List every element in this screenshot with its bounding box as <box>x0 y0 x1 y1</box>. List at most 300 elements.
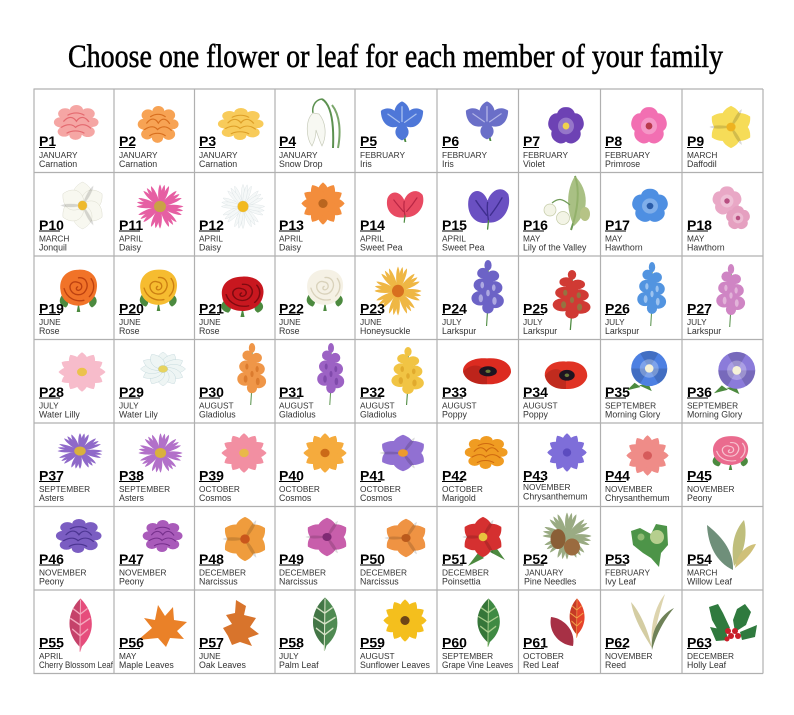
label P13: P13 <box>279 217 304 233</box>
label P41: OCTOBER <box>360 484 401 494</box>
cell P48 <box>199 517 270 586</box>
label P4 <box>279 133 323 169</box>
cell P18 <box>687 186 751 252</box>
label P27 <box>687 300 721 336</box>
label P29: P29 <box>119 384 144 400</box>
label P13: Daisy <box>279 242 302 252</box>
label P53: FEBRUARY <box>605 568 650 578</box>
label P60: SEPTEMBER <box>442 651 493 661</box>
icon: gladiolus <box>317 343 344 405</box>
label P46: P46 <box>39 551 64 567</box>
label P57 <box>199 634 247 670</box>
label P24: P24 <box>442 300 467 316</box>
icon: red leaf <box>551 598 585 646</box>
icon: aster <box>57 433 103 469</box>
icon: rose <box>221 277 264 317</box>
icon: snow drop <box>307 99 340 148</box>
label P7: P7 <box>523 133 540 149</box>
label P59 <box>360 634 431 670</box>
icon: gladiolus <box>237 343 266 405</box>
label P32: P32 <box>360 384 385 400</box>
label P32: Gladiolus <box>360 410 397 420</box>
label P19: JUNE <box>39 317 61 327</box>
label P28: P28 <box>39 384 64 400</box>
cell P29 <box>119 352 186 420</box>
label P1: JANUARY <box>39 150 78 160</box>
label P31: AUGUST <box>279 400 314 410</box>
label P38: SEPTEMBER <box>119 484 170 494</box>
label P31: Gladiolus <box>279 410 316 420</box>
label P41 <box>360 468 401 503</box>
cell P38 <box>119 433 183 503</box>
label P52: Pine Needles <box>524 576 577 586</box>
label P22: JUNE <box>279 317 301 327</box>
label P13: APRIL <box>279 234 303 244</box>
label P17: P17 <box>605 217 630 233</box>
cell P19 <box>39 270 97 336</box>
cell P11 <box>119 184 184 252</box>
label P17 <box>605 217 643 252</box>
label P23: P23 <box>360 300 385 316</box>
cell P57 <box>199 600 259 670</box>
label P5: FEBRUARY <box>360 150 405 160</box>
label P16: P16 <box>523 217 548 233</box>
label P20 <box>119 300 144 336</box>
label P33: AUGUST <box>442 400 477 410</box>
icon: daisy <box>301 182 345 225</box>
label P29: JULY <box>119 400 139 410</box>
label P46 <box>39 551 86 586</box>
label P58: JULY <box>279 651 299 661</box>
label P8: FEBRUARY <box>605 150 650 160</box>
cell P10 <box>39 182 107 252</box>
label P35: SEPTEMBER <box>605 400 656 410</box>
label P12: Daisy <box>199 242 222 252</box>
label P37 <box>39 468 90 503</box>
label P56: MAY <box>119 651 137 661</box>
label P29 <box>119 384 158 420</box>
label P47: Peony <box>119 576 145 586</box>
label P5 <box>360 133 405 169</box>
cell P52 <box>523 512 591 586</box>
label P38: P38 <box>119 468 144 484</box>
label P12: APRIL <box>199 234 223 244</box>
label P4: P4 <box>279 133 296 149</box>
cell P59 <box>360 599 431 670</box>
icon: jonquil <box>58 182 107 229</box>
cell P47 <box>119 520 183 586</box>
label P16: Lily of the Valley <box>523 242 587 252</box>
label P61: P61 <box>523 634 548 650</box>
label P12: P12 <box>199 217 224 233</box>
label P30 <box>199 384 236 420</box>
cell P20 <box>119 270 177 336</box>
label P3: P3 <box>199 133 216 149</box>
label P52: JANUARY <box>525 568 564 578</box>
label P3: JANUARY <box>199 150 238 160</box>
label P37: Asters <box>39 493 65 503</box>
cell P28 <box>39 352 106 420</box>
label P35: P35 <box>605 384 630 400</box>
label P63: P63 <box>687 634 712 650</box>
label P26: JULY <box>605 317 625 327</box>
icon: chrysanthemum <box>626 435 669 476</box>
label P44: Chrysanthemum <box>605 493 670 503</box>
icon: poppy <box>463 358 511 384</box>
cell P22 <box>279 270 343 336</box>
label P34: Poppy <box>523 410 549 420</box>
cell P15 <box>442 189 509 252</box>
label P45: P45 <box>687 468 712 484</box>
cell P24 <box>442 260 504 336</box>
label P32 <box>360 384 397 420</box>
cell P33 <box>442 358 511 420</box>
label P6 <box>442 133 487 169</box>
icon: sunflower <box>383 599 427 642</box>
label P33: Poppy <box>442 410 468 420</box>
cell P49 <box>279 518 351 586</box>
cell P56 <box>119 605 187 670</box>
label P36: P36 <box>687 384 712 400</box>
label P10: Jonquil <box>39 242 67 252</box>
icon: morning glory <box>627 351 667 391</box>
label P47 <box>119 551 166 586</box>
cell P25 <box>523 270 590 336</box>
cell P46 <box>39 519 102 586</box>
label P56: Maple Leaves <box>119 660 174 670</box>
label P9: MARCH <box>687 150 717 160</box>
label P45 <box>687 468 734 503</box>
cell P9 <box>687 106 755 169</box>
cell P16 <box>523 176 590 252</box>
label P34 <box>523 384 558 420</box>
label P42 <box>442 468 483 503</box>
label P39: Cosmos <box>199 493 232 503</box>
label P7: Violet <box>523 159 545 169</box>
label P50: Narcissus <box>360 576 399 586</box>
cell P26 <box>605 262 666 336</box>
icon: carnation <box>218 108 264 140</box>
label P10 <box>39 217 69 252</box>
cell P40 <box>279 433 347 503</box>
cell P51 <box>442 517 506 586</box>
label P30: AUGUST <box>199 400 234 410</box>
cell P60 <box>442 598 514 670</box>
cell P27 <box>687 264 745 336</box>
label P50: DECEMBER <box>360 568 407 578</box>
label P46: NOVEMBER <box>39 568 86 578</box>
label P59: AUGUST <box>360 651 395 661</box>
label P22: P22 <box>279 300 304 316</box>
icon: sweet pea <box>387 191 423 222</box>
label P50: P50 <box>360 551 385 567</box>
label P13 <box>279 217 304 252</box>
cell P6 <box>442 101 508 169</box>
label P63: DECEMBER <box>687 651 734 661</box>
label P7 <box>523 133 568 169</box>
icon: aster <box>138 433 183 473</box>
icon: hawthorn <box>630 189 670 225</box>
label P50 <box>360 551 407 586</box>
icon: gladiolus <box>391 347 424 405</box>
cell P44 <box>605 435 670 503</box>
cell P5 <box>360 101 423 169</box>
label P40: P40 <box>279 468 304 484</box>
label P18: P18 <box>687 217 712 233</box>
cell P37 <box>39 433 103 503</box>
label P34: AUGUST <box>523 400 558 410</box>
label P22 <box>279 300 304 336</box>
cell P61 <box>523 598 585 670</box>
icon: cosmos <box>303 433 347 473</box>
label P26: P26 <box>605 300 630 316</box>
label P21 <box>199 300 224 336</box>
cell P62 <box>605 594 674 670</box>
label P25: P25 <box>523 300 548 316</box>
icon: narcissus <box>303 518 351 556</box>
icon: ivy leaf <box>631 524 668 567</box>
icon: daisy <box>136 184 184 229</box>
label P57: JUNE <box>199 651 221 661</box>
label P24 <box>442 300 476 336</box>
label P53: P53 <box>605 551 630 567</box>
label P53: Ivy Leaf <box>605 576 636 586</box>
cell P2 <box>119 106 179 169</box>
icon: palm leaf <box>313 598 337 651</box>
label P23: Honeysuckle <box>360 326 410 336</box>
icon: rose <box>60 270 97 312</box>
icon: carnation <box>54 105 99 140</box>
icon: poinsettia <box>460 517 506 566</box>
label P55: P55 <box>39 634 64 650</box>
label P46: Peony <box>39 576 65 586</box>
label P24: Larkspur <box>442 326 476 336</box>
icon: water lily <box>58 352 106 392</box>
cell P54 <box>687 520 756 586</box>
label P34: P34 <box>523 384 548 400</box>
label P14: Sweet Pea <box>360 242 403 252</box>
label P62 <box>605 634 652 670</box>
label P1: Carnation <box>39 159 77 169</box>
label P41: Cosmos <box>360 493 393 503</box>
cell P17 <box>605 189 670 252</box>
cell P8 <box>605 107 669 169</box>
icon: larkspur <box>637 262 666 326</box>
icon: larkspur <box>471 260 504 326</box>
label P33 <box>442 384 477 420</box>
label P39 <box>199 468 240 503</box>
label P11 <box>119 217 143 252</box>
label P24: JULY <box>442 317 462 327</box>
label P56: P56 <box>119 634 144 650</box>
label P19: Rose <box>39 326 60 336</box>
cell P42 <box>442 436 508 503</box>
label P27: P27 <box>687 300 712 316</box>
icon: violet <box>546 107 586 147</box>
label P42: Marigold <box>442 493 476 503</box>
label P15: Sweet Pea <box>442 242 485 252</box>
label P54 <box>687 551 733 586</box>
label P47: P47 <box>119 551 144 567</box>
icon: lily of the valley <box>544 176 590 230</box>
icon: grape vine leaf <box>477 598 500 647</box>
icon: poppy <box>545 361 587 389</box>
label P11: P11 <box>119 217 143 233</box>
label P54: Willow Leaf <box>687 576 733 586</box>
label P55: Cherry Blossom Leaf <box>39 660 113 670</box>
label P27: JULY <box>687 317 707 327</box>
label P10: P10 <box>39 217 64 233</box>
label P56 <box>119 634 174 670</box>
label P57: P57 <box>199 634 224 650</box>
label P9 <box>687 133 717 169</box>
label P6: Iris <box>442 159 454 169</box>
label P51: Poinsettia <box>442 576 481 586</box>
label P32: AUGUST <box>360 400 395 410</box>
label P15: APRIL <box>442 234 466 244</box>
label P23 <box>360 300 410 336</box>
cell P21 <box>199 277 264 336</box>
label P35: Morning Glory <box>605 410 661 420</box>
icon: peony <box>56 519 102 553</box>
cell P63 <box>687 604 757 670</box>
label P59: Sunflower Leaves <box>360 660 431 670</box>
label P36 <box>687 384 743 420</box>
label P60: Grape Vine Leaves <box>442 660 514 670</box>
label P40: Cosmos <box>279 493 312 503</box>
label P48: Narcissus <box>199 576 238 586</box>
label P26 <box>605 300 639 336</box>
label P7: FEBRUARY <box>523 150 568 160</box>
label P37: P37 <box>39 468 64 484</box>
icon: cosmos <box>377 435 429 471</box>
label P28 <box>39 384 80 420</box>
label P31: P31 <box>279 384 304 400</box>
label P52: P52 <box>523 551 548 567</box>
icon: sweet pea <box>468 189 509 229</box>
icon: rose <box>140 270 177 311</box>
label P49: DECEMBER <box>279 568 326 578</box>
label P57: Oak Leaves <box>199 660 247 670</box>
label P38 <box>119 468 170 503</box>
label P20: Rose <box>119 326 140 336</box>
label P63: Holly Leaf <box>687 660 727 670</box>
icon: larkspur <box>553 270 590 330</box>
label P1: P1 <box>39 133 56 149</box>
icon: narcissus <box>220 517 270 561</box>
label P6: FEBRUARY <box>442 150 487 160</box>
icon: cosmos <box>221 433 267 473</box>
cell P14 <box>360 191 423 252</box>
label P11: Daisy <box>119 242 142 252</box>
label P51: P51 <box>442 551 467 567</box>
icon: larkspur <box>716 264 745 327</box>
label P53 <box>605 551 650 586</box>
label P59: P59 <box>360 634 385 650</box>
label P62: Reed <box>605 660 626 670</box>
cell P36 <box>687 352 755 420</box>
icon: daisy <box>221 184 265 229</box>
label P8: P8 <box>605 133 622 149</box>
label P30: Gladiolus <box>199 410 236 420</box>
label P48 <box>199 551 246 586</box>
label P48: DECEMBER <box>199 568 246 578</box>
icon: holly leaf <box>709 604 757 642</box>
icon: peony <box>143 520 183 552</box>
icon: marigold <box>465 436 508 469</box>
label P62: P62 <box>605 634 630 650</box>
cell P30 <box>199 343 266 420</box>
icon: reed <box>631 594 674 650</box>
label P43: Chrysanthemum <box>523 492 588 502</box>
label P40: OCTOBER <box>279 484 320 494</box>
label P14: P14 <box>360 217 385 233</box>
label P6: P6 <box>442 133 459 149</box>
label P17: MAY <box>605 234 623 244</box>
label P3 <box>199 133 238 169</box>
label P16: MAY <box>523 234 541 244</box>
label P23: JUNE <box>360 317 382 327</box>
cell P13 <box>279 182 345 252</box>
label P2 <box>119 133 158 169</box>
label P5: P5 <box>360 133 377 149</box>
cell P53 <box>605 524 668 586</box>
label P28: Water Lilly <box>39 410 80 420</box>
label P18: Hawthorn <box>687 242 725 252</box>
label P9: Daffodil <box>687 159 717 169</box>
label P45: Peony <box>687 493 713 503</box>
cell P39 <box>199 433 267 503</box>
label P4: JANUARY <box>279 150 318 160</box>
label P14 <box>360 217 403 252</box>
cell P32 <box>360 347 424 420</box>
label P60: P60 <box>442 634 467 650</box>
label P58: P58 <box>279 634 304 650</box>
cell P58 <box>279 598 337 670</box>
cell P34 <box>523 361 587 420</box>
icon: narcissus <box>382 519 430 557</box>
label P49: P49 <box>279 551 304 567</box>
label P10: MARCH <box>39 234 69 244</box>
label P61: OCTOBER <box>523 651 564 661</box>
icon: chrysanthemum <box>547 433 587 472</box>
label P18 <box>687 217 725 252</box>
label P5: Iris <box>360 159 372 169</box>
label P3: Carnation <box>199 159 237 169</box>
icon: daffodil <box>707 106 755 148</box>
icon: pine needles <box>543 512 591 560</box>
label P54: P54 <box>687 551 712 567</box>
label P61: Red Leaf <box>523 660 559 670</box>
label P44: P44 <box>605 468 630 484</box>
label P58: Palm Leaf <box>279 660 319 670</box>
label P11: APRIL <box>119 234 143 244</box>
label P33: P33 <box>442 384 467 400</box>
label P40 <box>279 468 320 503</box>
icon: peony <box>713 436 748 470</box>
label P51: DECEMBER <box>442 568 489 578</box>
label P15 <box>442 217 485 252</box>
label P2: JANUARY <box>119 150 158 160</box>
label P20: JUNE <box>119 317 141 327</box>
cell P4 <box>279 99 340 169</box>
label P2: Carnation <box>119 159 157 169</box>
label P21: P21 <box>199 300 224 316</box>
label P51 <box>442 551 489 586</box>
label P21: Rose <box>199 326 220 336</box>
icon: carnation <box>138 106 179 143</box>
label P55 <box>39 634 113 670</box>
